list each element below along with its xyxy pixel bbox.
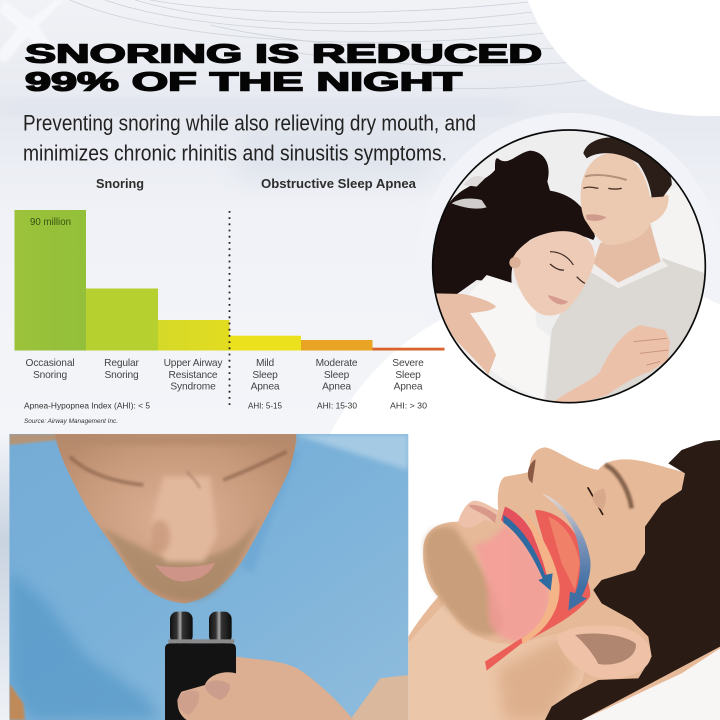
pillow	[582, 648, 720, 720]
red airway tissue	[485, 510, 590, 671]
woman's hair	[430, 151, 595, 297]
bar category labels: Apnea	[394, 382, 423, 392]
pink throat overlay	[473, 523, 550, 642]
mouth	[458, 501, 498, 528]
bar category labels	[26, 358, 424, 392]
photo: man inhaling from anti-snoring device	[9, 434, 408, 720]
title: SNORING IS REDUCED	[25, 38, 542, 68]
AHI labels: Apnea-Hypopnea Index (AHI): < 5	[24, 400, 150, 410]
bar: moderate sleep apnea	[301, 340, 372, 350]
bar: mild sleep apnea	[230, 336, 301, 350]
stubble	[424, 527, 504, 635]
bar chart: snoring and sleep apnea	[14, 176, 444, 425]
source note: Source: Airway Management Inc.	[24, 418, 118, 425]
bar category labels: Occasional	[26, 358, 74, 369]
woman's shirt	[482, 275, 512, 284]
AHI labels	[24, 400, 427, 410]
title: 99% OF THE NIGHT	[25, 66, 462, 96]
face and neck	[408, 447, 720, 720]
bar category labels: Syndrome	[170, 382, 216, 392]
bar category labels: Severe	[392, 358, 424, 369]
device	[165, 612, 236, 720]
bar category labels: Moderate	[316, 358, 358, 369]
tongue band	[522, 510, 560, 644]
airway arrow 2	[542, 493, 591, 611]
lips	[155, 563, 215, 581]
bar category labels: Regular	[104, 358, 140, 369]
AHI labels: AHI: 15-30	[317, 400, 357, 410]
subtitle: Preventing snoring while also relieving dry mouth, and	[23, 110, 476, 136]
bar category labels: Sleep	[324, 370, 350, 381]
hand	[178, 657, 353, 720]
man's hair	[583, 137, 672, 197]
subtitle	[23, 110, 476, 166]
woman's face	[512, 231, 595, 316]
hair	[545, 440, 720, 720]
man's neck and face	[593, 223, 661, 283]
bar category labels: Apnea	[251, 382, 280, 392]
bar category labels: Apnea	[322, 382, 351, 392]
photo: side profile with airway diagram	[408, 434, 720, 720]
bar category labels: Snoring	[33, 370, 68, 381]
bar category labels: Resistance	[169, 370, 218, 381]
bar: upper airway resistance syndrome	[158, 320, 230, 350]
nostril, eye, brow	[528, 459, 536, 483]
bar category labels: Mild	[256, 358, 275, 369]
AHI labels: AHI: 5-15	[248, 400, 282, 410]
heading: Snoring: Snoring	[96, 176, 144, 191]
bar category labels: Upper Airway	[164, 358, 223, 369]
ear	[557, 625, 651, 679]
bar category labels: Snoring	[104, 370, 139, 381]
photo: sleeping couple in circle	[430, 127, 710, 407]
title	[25, 38, 542, 96]
dotted divider	[228, 211, 230, 408]
AHI labels: AHI: > 30	[390, 400, 427, 410]
woman's arm	[435, 293, 496, 375]
airway arrow 1	[503, 515, 553, 591]
bar category labels: Sleep	[395, 370, 421, 381]
subtitle: minimizes chronic rhinitis and sinusitis symptoms.	[23, 140, 447, 166]
man's hand	[553, 325, 670, 402]
bar category labels: Sleep	[252, 370, 278, 381]
value label: 90 million: 90 million	[30, 217, 71, 228]
bar: severe sleep apnea	[372, 348, 444, 350]
bar: regular snoring	[86, 288, 158, 350]
face	[55, 434, 296, 603]
heading: Obstructive Sleep Apnea: Obstructive Sleep Apnea	[261, 176, 417, 191]
man's shirt	[545, 258, 710, 403]
bar: occasional snoring	[14, 210, 86, 350]
